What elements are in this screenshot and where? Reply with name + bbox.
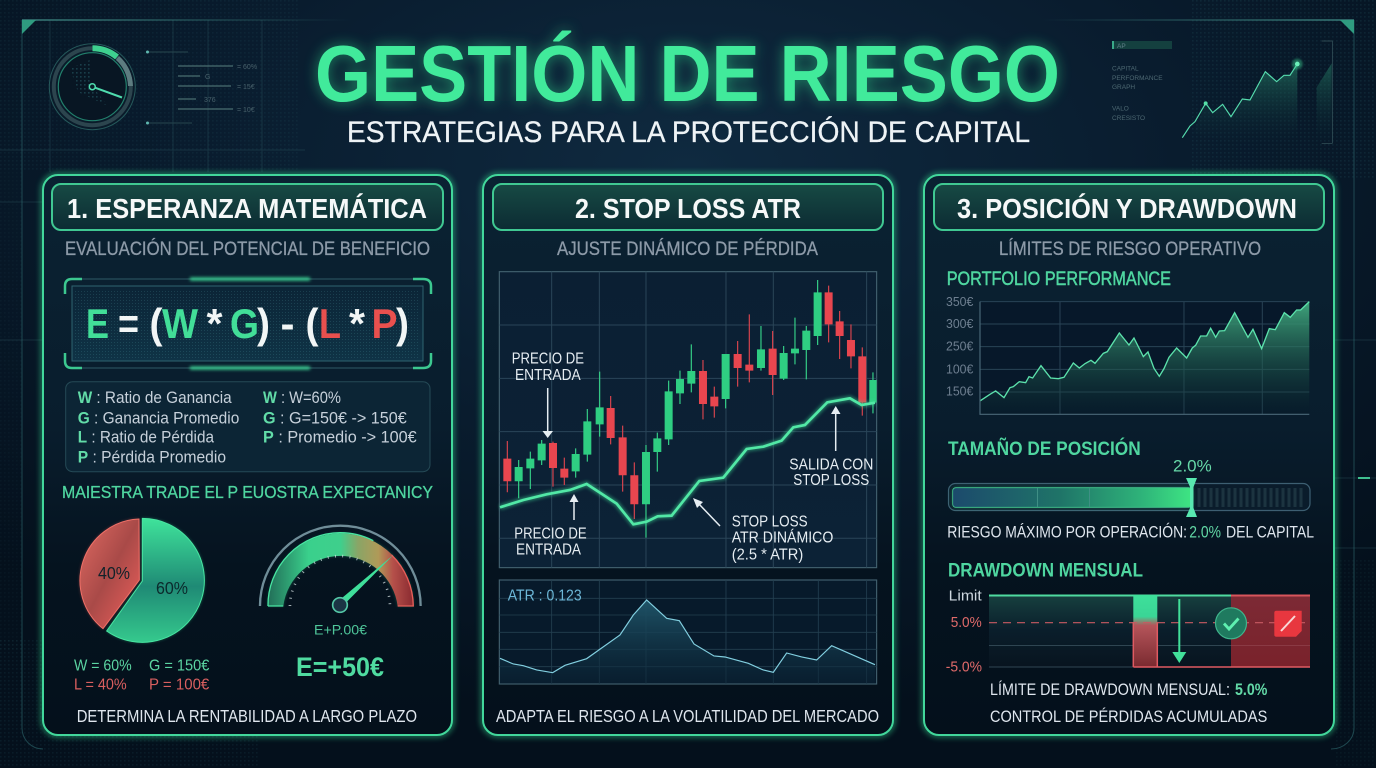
- decorative chart top right: CAPITAL: [1112, 66, 1139, 73]
- annotation: precio de entrada top: PRECIO DE: [512, 350, 584, 367]
- pie chart: 40%: [98, 563, 130, 583]
- variables legend: G : Ganancia Promedio: [78, 409, 239, 427]
- drawdown axis labels: -5.0%: [946, 659, 982, 676]
- risk per trade text: 2.0%: [1189, 523, 1221, 541]
- annotation: salida con stop loss: [789, 406, 873, 489]
- panel 2 header: 2. STOP LOSS ATR: [575, 193, 801, 224]
- decorative chart top right: GRAPH: [1112, 84, 1135, 91]
- section heading: MAIESTRA TRADE EL P EUOSTRA EXPECTANICY: [62, 482, 433, 502]
- annotation: precio de entrada bottom: ENTRADA: [516, 541, 582, 558]
- formula box: P: [372, 300, 398, 347]
- portfolio chart: [946, 294, 1309, 414]
- variables legend: P : Pérdida Promedio: [78, 448, 226, 466]
- subtitle: ESTRATEGIAS PARA LA PROTECCIÓN DE CAPITAL: [347, 116, 1030, 149]
- annotation: precio de entrada top: [512, 350, 584, 438]
- annotation: precio de entrada bottom: [514, 494, 587, 558]
- decorative readout lines: = 60%: [237, 64, 257, 71]
- formula box: ): [396, 300, 409, 347]
- portfolio chart: 250€: [946, 339, 974, 354]
- atr chart: [499, 580, 877, 684]
- variables legend: P : Promedio -> 100€: [263, 429, 417, 447]
- pie values: W = 60%: [74, 658, 132, 675]
- panel 2 subtitle: AJUSTE DINÁMICO DE PÉRDIDA: [557, 239, 818, 260]
- panel 1 header: [52, 184, 443, 230]
- portfolio chart: 150€: [946, 384, 974, 399]
- panel 2: stop loss atr: [483, 175, 893, 735]
- portfolio chart: 350€: [946, 294, 974, 309]
- formula box: -: [280, 300, 294, 347]
- pie values: [74, 658, 209, 693]
- portfolio chart: 300€: [946, 316, 974, 331]
- candlestick chart: [499, 272, 877, 568]
- decorative chart top right: CRESISTO: [1112, 115, 1145, 122]
- decorative chart top right: VALO: [1112, 106, 1129, 113]
- atr chart: ATR : 0.123: [508, 588, 582, 605]
- decorative readout lines: = 10€: [237, 107, 255, 114]
- drawdown axis labels: Limit: [949, 588, 983, 605]
- panel 3 header: 3. POSICIÓN Y DRAWDOWN: [957, 193, 1297, 224]
- formula box: [65, 279, 431, 368]
- annotation: precio de entrada top: ENTRADA: [515, 367, 581, 384]
- decorative chart top right: PERFORMANCE: [1112, 75, 1163, 82]
- drawdown heading: DRAWDOWN MENSUAL: [948, 561, 1143, 582]
- formula box: *: [349, 300, 366, 347]
- gauge: [260, 526, 421, 638]
- portfolio heading: PORTFOLIO PERFORMANCE: [947, 269, 1171, 290]
- pie chart: 60%: [156, 578, 188, 598]
- variables legend: [66, 382, 430, 472]
- decorative chart top right: AP: [1117, 43, 1126, 50]
- formula box: (: [306, 300, 318, 347]
- variables legend: G : G=150€ -> 150€: [263, 409, 407, 427]
- position size bar: [948, 478, 1310, 517]
- drawdown arrow: [1172, 599, 1186, 663]
- pie values: G = 150€: [149, 658, 209, 675]
- formula box: E: [86, 300, 109, 347]
- formula box: =: [118, 300, 139, 347]
- check icon: [1216, 608, 1246, 639]
- annotation: salida con stop loss: SALIDA CON: [789, 456, 873, 473]
- drawdown axis labels: [946, 588, 983, 676]
- annotation: stop loss atr dinámico: [693, 498, 833, 563]
- panel 1 header: 1. ESPERANZA MATEMÁTICA: [67, 193, 427, 224]
- decorative chart top right: [1112, 41, 1332, 143]
- panel 3 footer: CONTROL DE PÉRDIDAS ACUMULADAS: [990, 707, 1267, 726]
- decorative readout lines: [146, 50, 257, 124]
- annotation: salida con stop loss: STOP LOSS: [793, 472, 869, 489]
- decorative readout lines: G: [205, 74, 210, 81]
- gauge: E+P.00€: [314, 622, 367, 638]
- pie values: L = 40%: [74, 676, 127, 693]
- title: GESTIÓN DE RIESGO: [315, 29, 1060, 118]
- variables legend: W : W=60%: [263, 389, 341, 407]
- drawdown axis labels: 5.0%: [951, 614, 982, 631]
- panel 2 header: [493, 184, 883, 230]
- drawdown limit text: LÍMITE DE DRAWDOWN MENSUAL:: [990, 680, 1230, 699]
- panel 1 subtitle: EVALUACIÓN DEL POTENCIAL DE BENEFICIO: [65, 238, 430, 260]
- formula box: *: [206, 300, 223, 347]
- position size heading: TAMAÑO DE POSICIÓN: [948, 438, 1141, 460]
- variables legend: L : Ratio de Pérdida: [78, 429, 215, 447]
- decorative readout lines: 376: [204, 97, 216, 104]
- pie values: P = 100€: [149, 676, 209, 693]
- annotation: precio de entrada bottom: PRECIO DE: [514, 525, 587, 542]
- annotation: stop loss atr dinámico: (2.5 * ATR): [732, 546, 803, 563]
- decorative gauge top left: [49, 44, 135, 130]
- portfolio chart: 100€: [946, 361, 974, 376]
- risk per trade text: RIESGO MÁXIMO POR OPERACIÓN:: [947, 522, 1187, 541]
- decorative readout lines: = 15€: [237, 84, 255, 91]
- risk per trade text: DEL CAPITAL: [1226, 523, 1314, 541]
- formula box: ): [257, 300, 270, 347]
- title: GESTIÓN DE RIESGO: [315, 29, 1060, 118]
- variables legend: W : Ratio de Ganancia: [78, 389, 232, 407]
- annotation: stop loss atr dinámico: STOP LOSS: [732, 514, 808, 531]
- formula box: W: [162, 300, 198, 347]
- panel 1 footer: DETERMINA LA RENTABILIDAD A LARGO PLAZO: [77, 706, 417, 726]
- panel 3: posición y drawdown: [924, 175, 1334, 735]
- position size value: 2.0%: [1173, 457, 1212, 476]
- formula box: G: [230, 300, 259, 347]
- drawdown limit text: 5.0%: [1235, 681, 1268, 699]
- formula box: L: [319, 300, 341, 347]
- drawdown chart: [989, 594, 1310, 667]
- panel 1: esperanza matemática: [43, 175, 452, 735]
- pie chart: [80, 518, 204, 642]
- formula box: (: [150, 300, 162, 347]
- expectancy result: E=+50€: [296, 652, 384, 682]
- panel 3 subtitle: LÍMITES DE RIESGO OPERATIVO: [999, 239, 1261, 260]
- stop icon: [1274, 611, 1302, 637]
- annotation: stop loss atr dinámico: ATR DINÁMICO: [732, 530, 833, 547]
- panel 3 header: [934, 184, 1324, 230]
- panel 2 footer: ADAPTA EL RIESGO A LA VOLATILIDAD DEL MERCADO: [496, 706, 879, 726]
